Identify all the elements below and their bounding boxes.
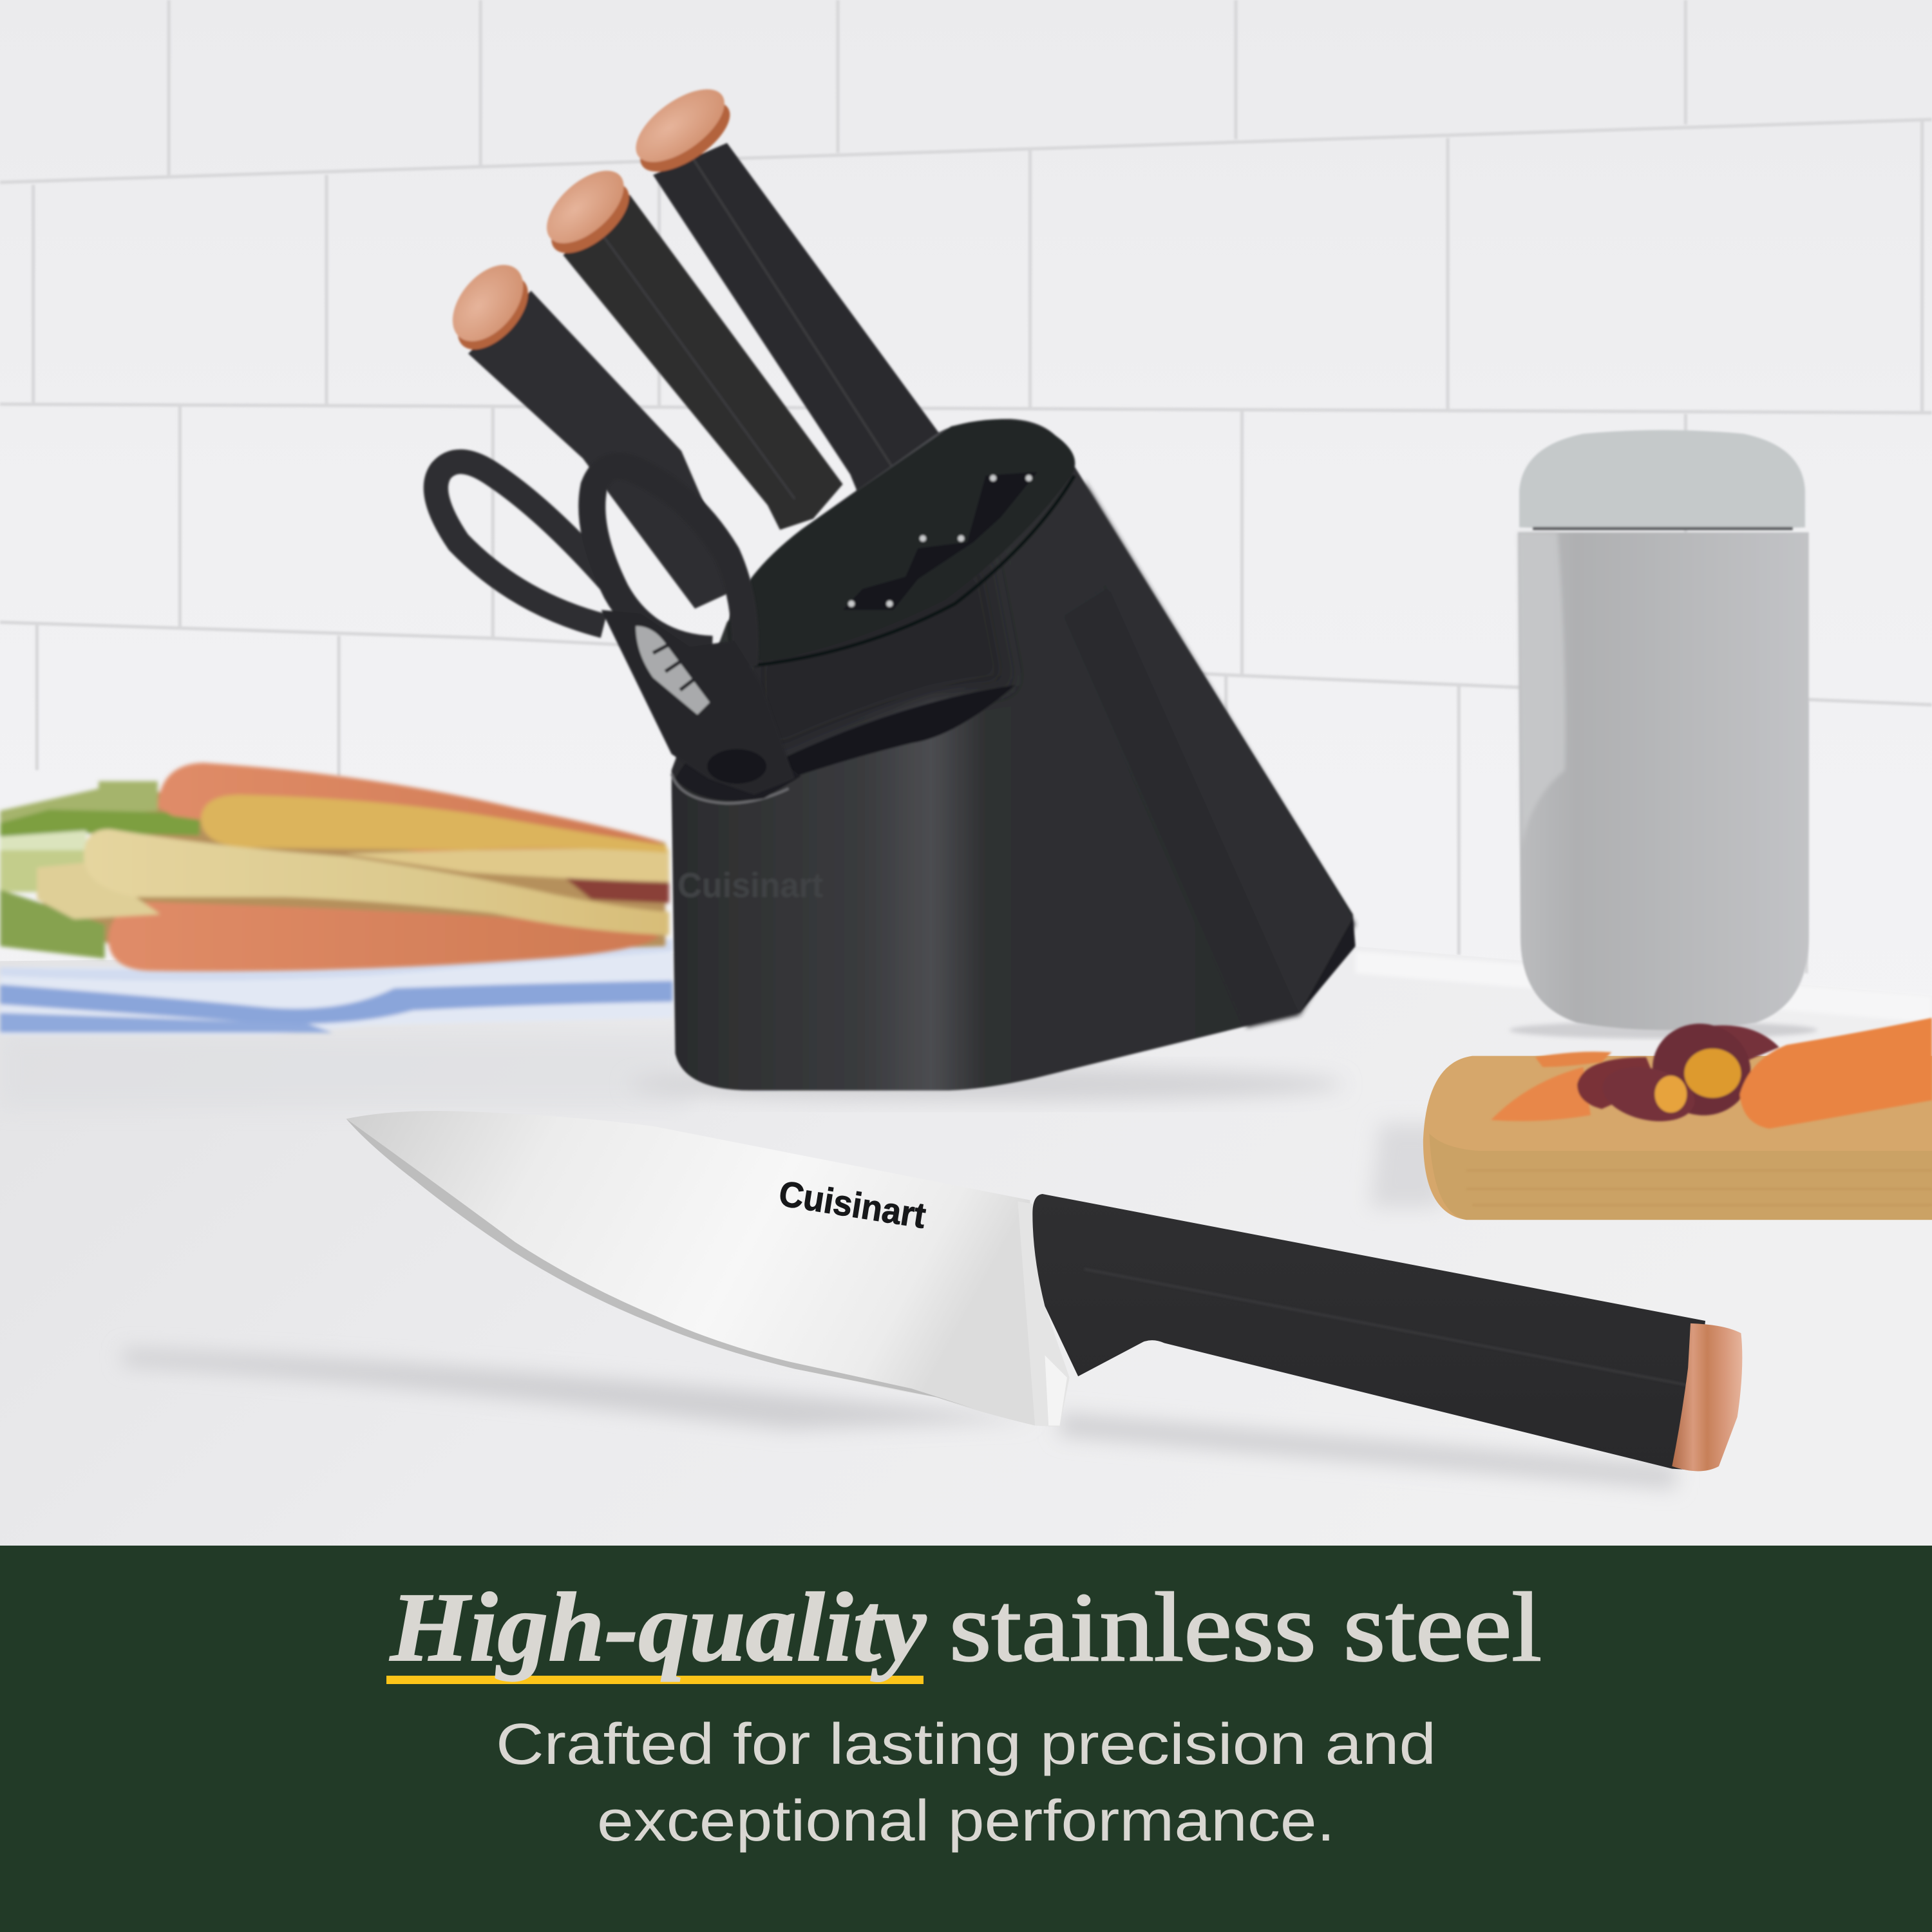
left loop — [436, 462, 616, 626]
rear parsnip — [345, 849, 669, 882]
subheading line 2: exceptional performance. — [597, 1789, 1335, 1853]
pivot — [707, 749, 766, 784]
bottom orange carrot — [108, 902, 659, 971]
bottom banner — [0, 1546, 1932, 1932]
scissors body — [601, 610, 795, 795]
carrot greens — [0, 781, 200, 959]
subheading line 1: Crafted for lasting precision and — [496, 1712, 1436, 1777]
block body — [672, 419, 1356, 1090]
board — [1423, 1056, 1932, 1220]
kitchen scissors — [436, 462, 795, 795]
bolster — [1018, 1201, 1070, 1427]
heading emphasis: High-quality — [389, 1573, 927, 1682]
grey canister — [1510, 430, 1817, 1039]
subheading — [496, 1712, 1436, 1853]
blade bevel — [346, 1119, 973, 1408]
countertop — [0, 946, 1932, 1548]
handle 2 — [534, 157, 843, 530]
block side cutout — [776, 685, 1016, 779]
handle 3 — [624, 75, 951, 502]
bunch of carrots — [0, 762, 669, 971]
heading — [389, 1573, 1542, 1682]
canister left reflection — [1518, 533, 1566, 850]
right loop — [592, 466, 745, 665]
sheath plate and rivets — [843, 472, 1037, 610]
handle 1 — [439, 252, 741, 609]
blue striped towel — [0, 939, 673, 1035]
orange back carrot — [158, 762, 665, 862]
small parsnip — [37, 862, 160, 919]
carrot pieces — [1491, 1013, 1932, 1129]
handle facet — [1084, 1269, 1693, 1386]
canister lid — [1519, 430, 1805, 530]
copper end cap — [1672, 1323, 1742, 1471]
underlay — [37, 788, 665, 961]
block top face — [727, 420, 1075, 661]
blade — [346, 1111, 1035, 1426]
yellow underline — [386, 1676, 923, 1684]
main parsnip — [84, 829, 669, 935]
upper body shade — [752, 554, 1010, 758]
heading remainder: stainless steel — [949, 1573, 1542, 1682]
knife block — [672, 419, 1356, 1090]
dark red carrot — [564, 870, 669, 903]
shadow below block — [629, 1067, 1343, 1101]
canister shadow — [1510, 1021, 1817, 1039]
chef knife shadow — [123, 1349, 1676, 1488]
serrated tool — [636, 626, 710, 715]
tiled wall — [0, 0, 1932, 1035]
block ribs — [1063, 480, 1356, 1028]
rear knife handles — [439, 75, 951, 609]
canister body — [1518, 533, 1809, 1030]
cutting board with carrots — [1370, 1013, 1932, 1220]
handle — [1032, 1194, 1705, 1470]
brand name on blade: Cuisinart — [776, 1173, 929, 1236]
base rim — [672, 774, 788, 803]
board shadow — [1370, 1124, 1442, 1208]
embossed block logo: Cuisinart — [677, 867, 823, 905]
chef knife — [346, 1111, 1742, 1471]
yellow carrot — [201, 795, 667, 853]
